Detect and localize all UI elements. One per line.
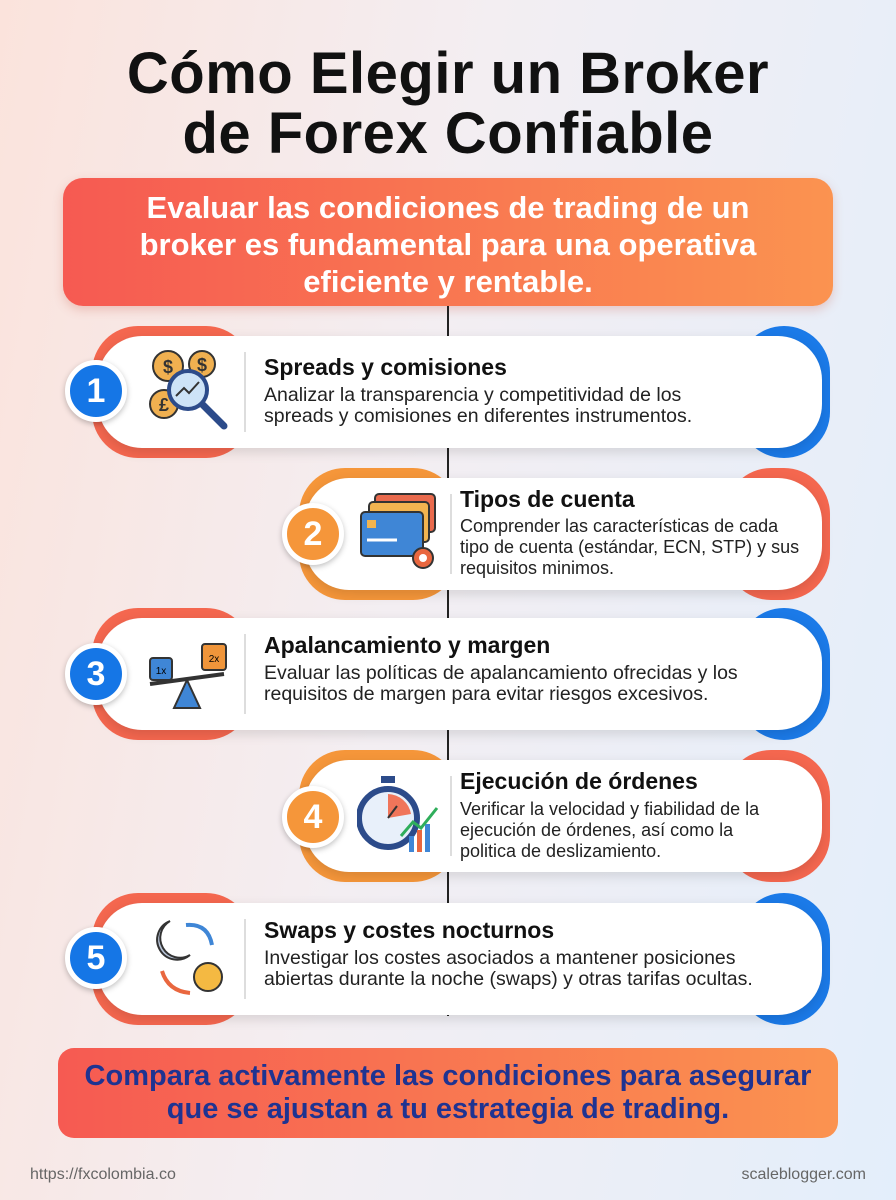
- title: Cómo Elegir un Broker: [127, 41, 769, 106]
- text: requisitos de margen para evitar riesgos excesivos.: [264, 683, 708, 705]
- footer left: https://fxcolombia.co: [30, 1166, 176, 1183]
- icon: coins magnifier: $: [197, 355, 207, 375]
- number 2: [282, 503, 344, 565]
- text: Analizar la transparencia y competitividad de los: [264, 384, 681, 406]
- number 5: 5: [87, 939, 105, 977]
- text: Investigar los costes asociados a mantener posiciones: [264, 947, 736, 969]
- timeline line: [447, 306, 449, 1016]
- number 3: [65, 643, 127, 705]
- icon: coins magnifier: [149, 350, 228, 430]
- text: [460, 799, 760, 861]
- text: [264, 662, 738, 705]
- number 4: 4: [304, 798, 322, 836]
- intro banner: [63, 178, 833, 306]
- bottom banner: Compara activamente las condiciones para asegurar: [85, 1060, 811, 1092]
- text: Evaluar las políticas de apalancamiento ofrecidas y los: [264, 662, 738, 684]
- icon: coins magnifier: $: [163, 357, 173, 377]
- text: requisitos minimos.: [460, 558, 614, 578]
- card 2: account types: [279, 468, 830, 600]
- icon: cards: [360, 493, 436, 569]
- heading: Apalancamiento y margen: [264, 632, 550, 658]
- number 2: 2: [304, 515, 322, 553]
- text: [460, 516, 799, 578]
- intro banner: broker es fundamental para una operativa: [140, 227, 756, 262]
- bottom banner: [58, 1048, 838, 1138]
- number 3: 3: [87, 655, 105, 693]
- text: [264, 384, 692, 427]
- number 1: [65, 360, 127, 422]
- heading: Swaps y costes nocturnos: [264, 917, 554, 943]
- card 1: spreads: [62, 326, 830, 458]
- text: ejecución de órdenes, así como la: [460, 820, 733, 840]
- text: politica de deslizamiento.: [460, 841, 661, 861]
- text: abiertas durante la noche (swaps) y otras tarifas ocultas.: [264, 968, 753, 990]
- heading: Ejecución de órdenes: [460, 768, 698, 794]
- number 1: 1: [87, 372, 105, 410]
- title: [127, 41, 769, 166]
- text: Verificar la velocidad y fiabilidad de la: [460, 799, 759, 819]
- number 5: [65, 927, 127, 989]
- icon: seesaw weights: 1x: [156, 666, 166, 677]
- card 3: leverage: [62, 608, 830, 740]
- footer right: scaleblogger.com: [741, 1166, 866, 1183]
- icon: seesaw weights: 2x: [209, 654, 219, 665]
- card 5: swaps: [62, 893, 830, 1025]
- intro banner: Evaluar las condiciones de trading de un: [147, 190, 749, 225]
- icon: moon sun: [156, 920, 223, 995]
- text: Comprender las características de cada: [460, 516, 778, 536]
- text: tipo de cuenta (estándar, ECN, STP) y sus: [460, 537, 799, 557]
- bottom banner: que se ajustan a tu estrategia de trading.: [167, 1093, 729, 1125]
- title: de Forex Confiable: [182, 101, 714, 166]
- intro banner: eficiente y rentable.: [303, 264, 593, 299]
- heading: Spreads y comisiones: [264, 354, 507, 380]
- text: [264, 947, 753, 990]
- icon: stopwatch: [357, 776, 438, 852]
- heading: Tipos de cuenta: [460, 486, 635, 512]
- card 4: execution: [279, 750, 830, 882]
- icon: coins magnifier: £: [159, 395, 169, 415]
- number 4: [282, 786, 344, 848]
- icon: seesaw weights: [149, 643, 227, 709]
- text: spreads y comisiones en diferentes instrumentos.: [264, 405, 692, 427]
